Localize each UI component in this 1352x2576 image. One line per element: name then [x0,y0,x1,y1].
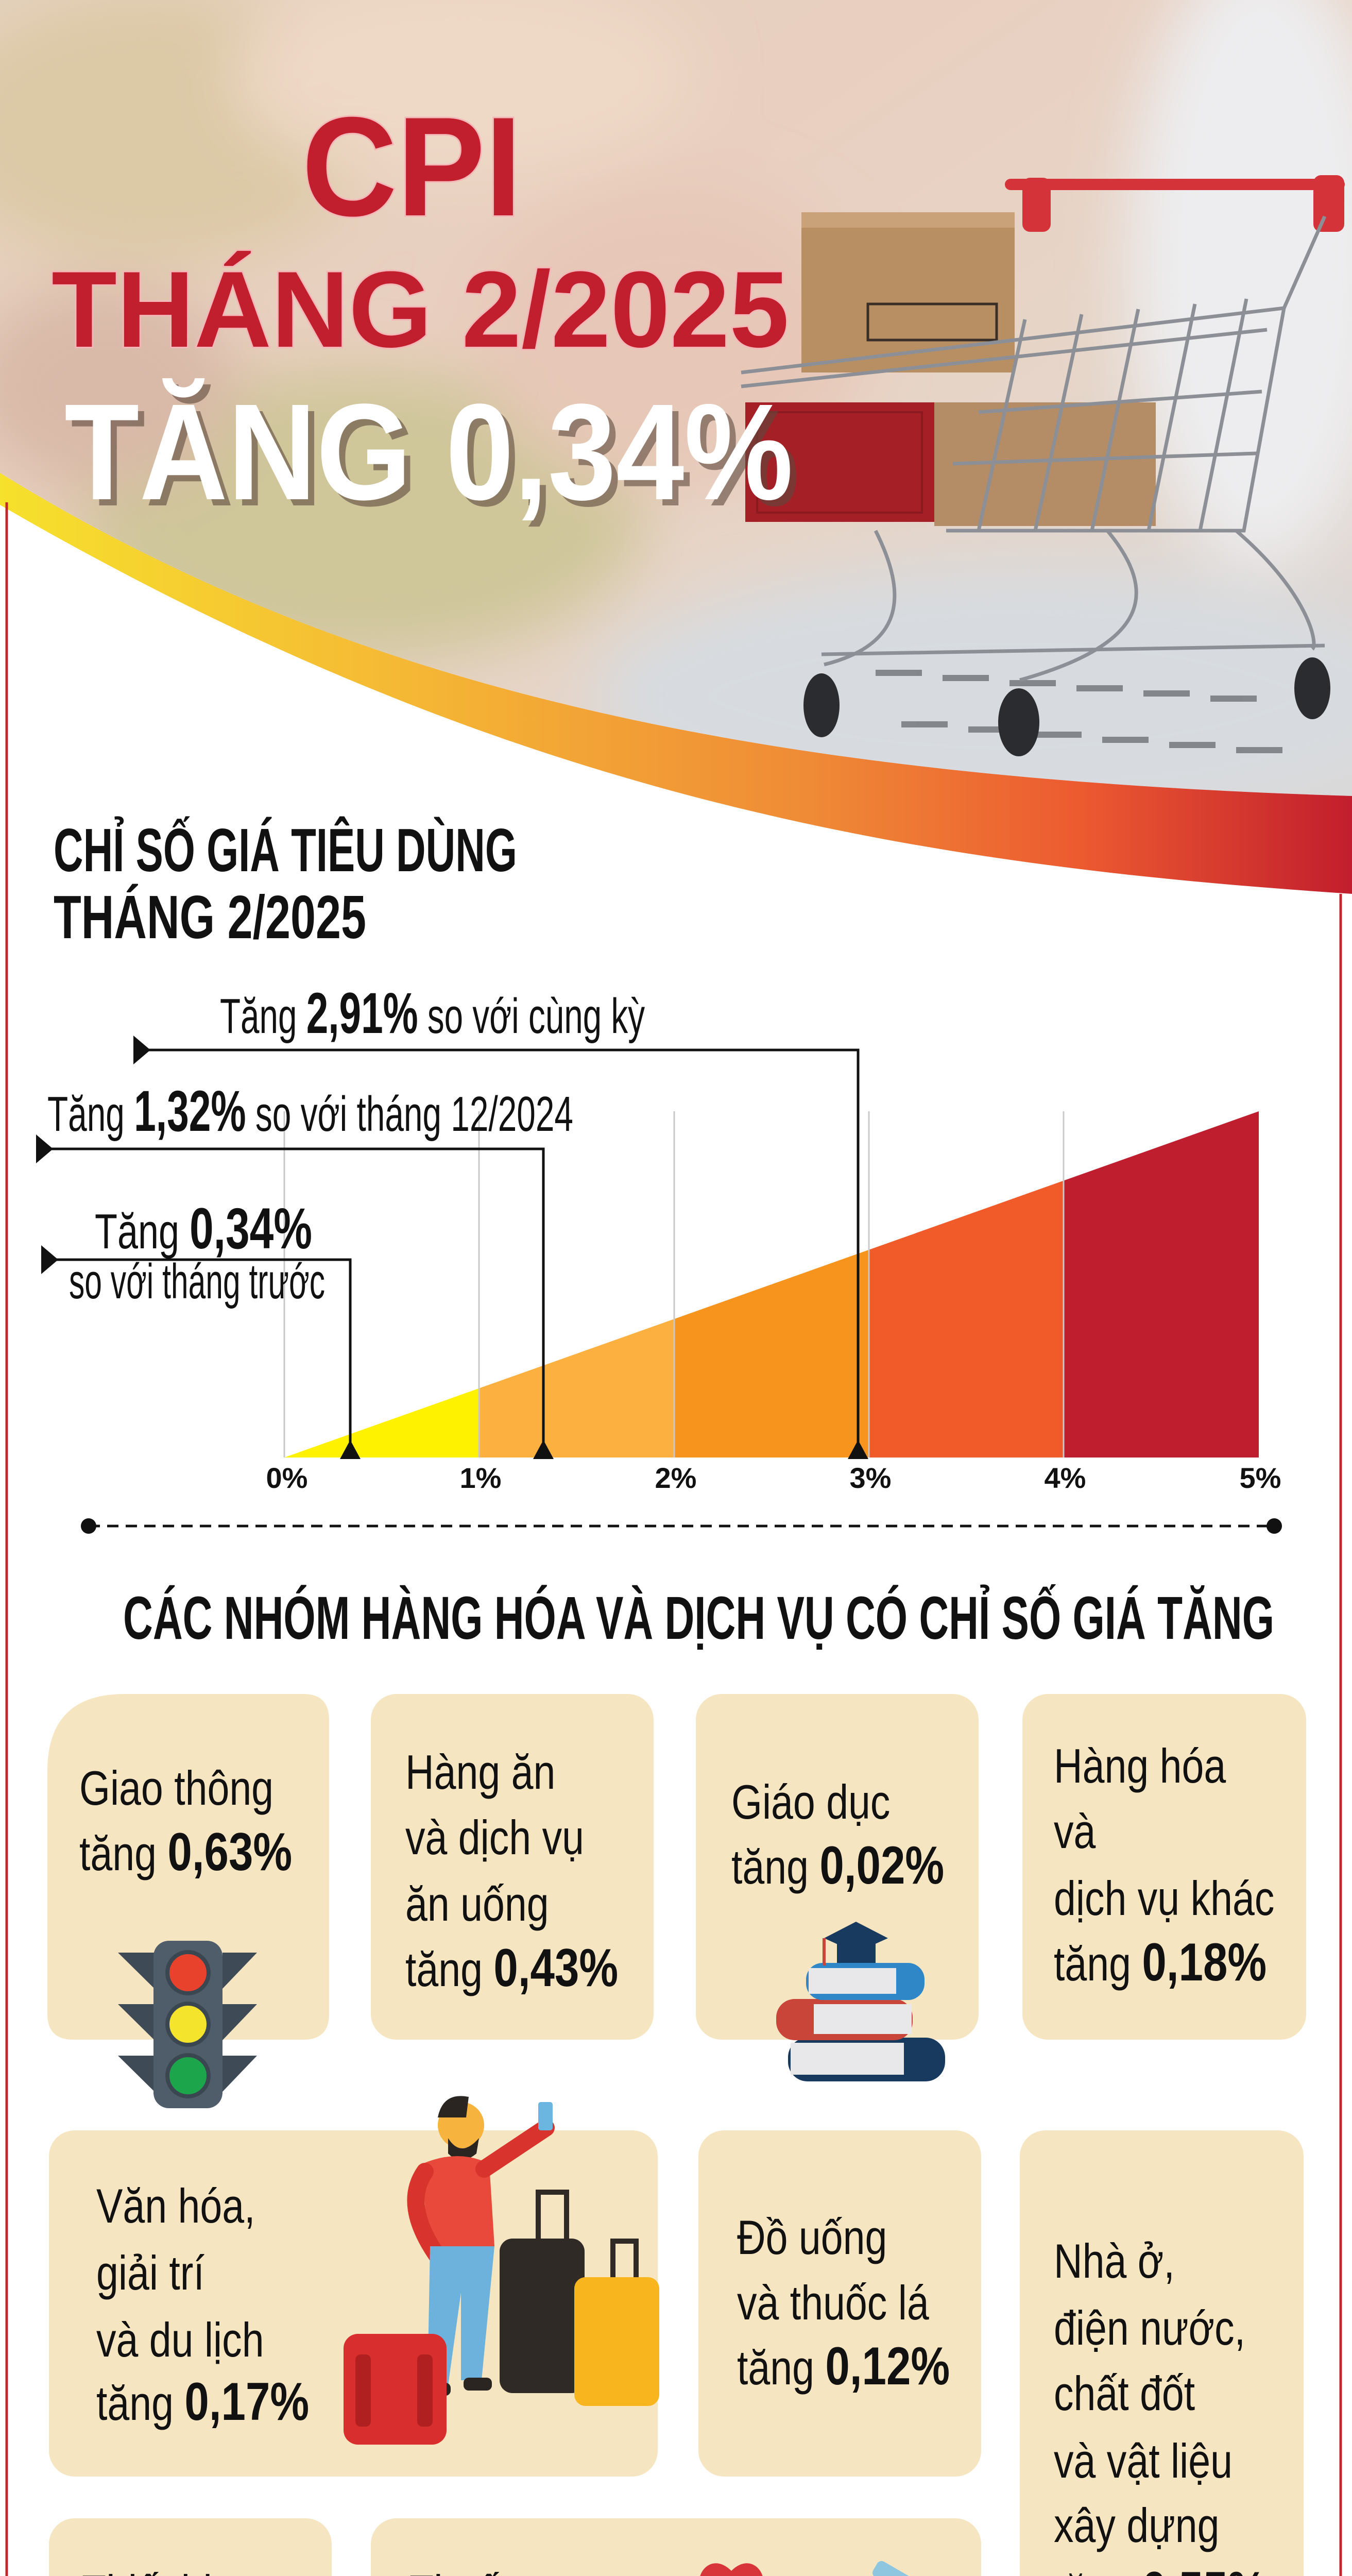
card: hang hoa va dich vu khac [1022,1694,1306,2040]
card: nha o dien nuoc: Nhà ở, [1054,2234,1175,2289]
page border [7,502,1341,2576]
card: giao duc: tăng 0,02% [731,1836,944,1895]
icon: traveler with suitcases [344,2096,659,2445]
card: hang an [371,1694,654,2040]
card: hang hoa va dich vu khac: dịch vụ khác [1054,1872,1274,1926]
card: hang hoa va dich vu khac: và [1054,1805,1096,1859]
chart: CPI scale 0-5%: 4% [1045,1462,1086,1494]
card: nha o dien nuoc [994,2130,1337,2576]
callout: tang 2,91% [133,981,868,1459]
card: thiet bi do dung gia dinh [49,2518,332,2576]
card: nha o dien nuoc: điện nước, [1054,2301,1245,2355]
callout: tang 2,91%: Tăng 2,91% so với cùng kỳ [220,981,645,1045]
callout: tang 0,34% [41,1196,361,1459]
callout: tang 0,34%: so với tháng trước [69,1254,325,1309]
card: do uong va thuoc la: và thuốc lá [737,2276,929,2330]
card: giao thong: Giao thông [79,1761,273,1816]
chart: CPI scale 0-5%: 5% [1240,1462,1281,1494]
card: van hoa giai tri du lich: Văn hóa, [96,2179,255,2233]
keyboard [876,670,1282,753]
card: hang an: và dịch vụ [405,1811,584,1865]
card: hang an: ăn uống [405,1877,549,1931]
card: nha o dien nuoc: xây dựng [1054,2499,1220,2553]
callout: tang 0,34%: Tăng 0,34% [95,1196,312,1261]
card: giao thong: tăng 0,63% [79,1822,292,1882]
title: TĂNG 0,34% [64,376,793,529]
card: van hoa giai tri du lich: tăng 0,17% [96,2372,309,2432]
card: nha o dien nuoc: và vật liệu [1054,2434,1233,2488]
card: hang an: tăng 0,43% [405,1938,618,1998]
chart: CPI scale 0-5%: 2% [655,1462,696,1494]
icon: traffic light [118,1941,257,2108]
card: hang hoa va dich vu khac: Hàng hóa [1054,1739,1226,1793]
icon: books [776,1922,945,2081]
card: thuoc va dich vu y te [371,2518,981,2576]
callout: tang 1,32%: Tăng 1,32% so với tháng 12/2024 [47,1079,573,1143]
title [52,88,799,535]
header photo background [0,0,1352,796]
title: CPI [302,88,522,246]
chart: CPI scale 0-5%: 3% [850,1462,891,1494]
card: van hoa giai tri du lich [49,2096,659,2477]
card: giao thong [47,1694,329,2108]
title: TĂNG 0,34% [71,382,799,535]
heading: chi so gia tieu dung: CHỈ SỐ GIÁ TIÊU DÙNG [54,816,517,885]
card: giao duc [696,1694,979,2081]
icon: shopping cart with boxes [741,175,1344,756]
card: nha o dien nuoc: chất đốt [1054,2367,1195,2421]
chart: CPI scale 0-5%: 1% [460,1462,501,1494]
card: do uong va thuoc la [698,2130,981,2477]
heading: chi so gia tieu dung: THÁNG 2/2025 [54,883,366,952]
card: do uong va thuoc la: Đồ uống [737,2211,887,2265]
icon: medical staff [644,2559,953,2576]
card: giao duc: Giáo dục [731,1775,890,1829]
title: THÁNG 2/2025 [52,249,789,370]
card: van hoa giai tri du lich: giải trí [96,2246,204,2300]
chart: CPI scale 0-5% [266,1108,1281,1494]
card: hang an: Hàng ăn [405,1745,555,1800]
card: van hoa giai tri du lich: và du lịch [96,2313,264,2367]
callout: tang 1,32% [36,1079,573,1459]
chart: CPI scale 0-5%: 0% [266,1462,307,1494]
heading: chi so gia tieu dung [54,816,517,952]
card: hang hoa va dich vu khac: tăng 0,18% [1054,1933,1267,1992]
card: do uong va thuoc la: tăng 0,12% [737,2336,950,2396]
